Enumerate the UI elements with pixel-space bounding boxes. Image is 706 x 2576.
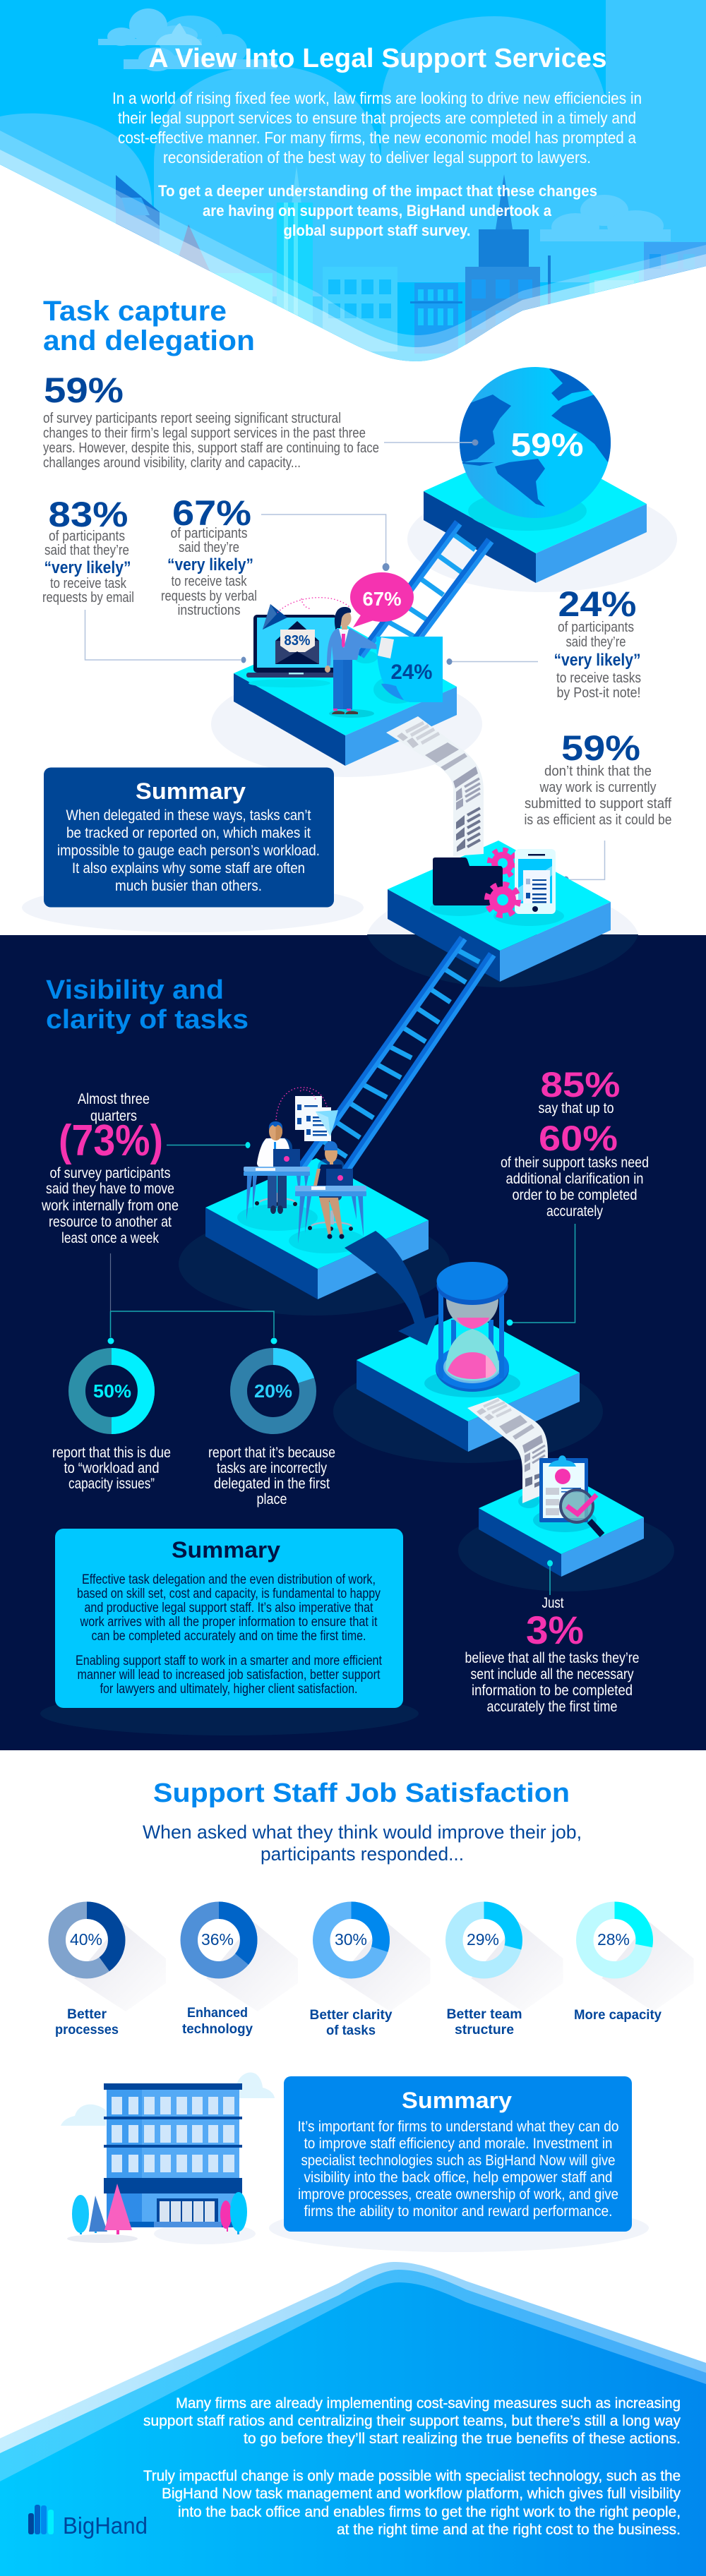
stat: 59 percent inefficient: submitted to support staff <box>525 796 671 812</box>
stat: 67 percent verbal: instructions <box>178 603 240 618</box>
stat: 59 percent structural changes: 59% <box>44 371 124 410</box>
decorative dotted arc: desk <box>276 1088 327 1120</box>
caption: incorrectly delegated: delegated in the first <box>214 1476 330 1492</box>
stat: 24 percent post-it <box>554 584 641 701</box>
stat: 59 percent inefficient <box>524 728 672 828</box>
icon: person <box>325 607 378 714</box>
label: envelope 83 percent: 83% <box>284 633 311 649</box>
connector: 73 percent to desk <box>167 1142 250 1148</box>
stat: 3 percent: sent include all the necessary <box>470 1666 634 1683</box>
text block: intro bold: are having on support teams, BigHand undertook a <box>203 202 552 219</box>
speech bubble: 67 percent <box>350 572 414 627</box>
stat: 83 percent email: to receive task <box>50 576 127 591</box>
stat: 59 percent inefficient: way work is currently <box>539 780 657 795</box>
stat: 73 percent: quarters <box>90 1108 137 1124</box>
stat: 59 percent structural changes <box>43 371 379 471</box>
icon: ladder upper <box>359 522 492 657</box>
summary: visibility: for lawyers and ultimately, higher client satisfaction. <box>100 1682 357 1697</box>
stat: 85 and 60 percent: 60% <box>539 1119 618 1158</box>
stat: 67 percent verbal: said they’re <box>179 540 239 555</box>
heading: task capture: Task capture <box>43 296 227 327</box>
donut: 20 percent <box>239 1356 308 1426</box>
stat: 59 percent inefficient: don’t think that the <box>544 764 652 779</box>
text block: intro: reconsideration of the best way to deliver legal support to lawyers. <box>163 148 591 167</box>
icon: paper plane <box>263 604 287 630</box>
stat: 59 percent structural changes: challanges around visibility, clarity and capacity... <box>43 455 301 471</box>
icon: globe <box>460 367 611 518</box>
summary: delegation: much busier than others. <box>115 878 262 894</box>
stat: 85 and 60 percent: additional clarification in <box>505 1171 644 1187</box>
text block: job satisfaction intro: When asked what they think would improve their job, <box>143 1822 582 1843</box>
text block: footer first paragraph <box>143 2395 681 2447</box>
stat: 24 percent post-it: of participants <box>558 620 634 635</box>
stat: 67 percent verbal: of participants <box>171 526 247 541</box>
summary: visibility: Effective task delegation and the even distribution of work, <box>82 1572 376 1587</box>
speech bubble: 67 percent: 67% <box>363 588 402 610</box>
decorative dotted arc: email <box>277 598 349 613</box>
summary: delegation: Summary <box>136 778 246 804</box>
text block: footer second paragraph <box>143 2468 681 2538</box>
donut: better processes 40 percent: processes <box>55 2023 119 2038</box>
stat: 24 percent post-it: “very likely” <box>554 651 641 670</box>
stat: 83 percent email: “very likely” <box>44 558 131 577</box>
caption: workload <box>52 1445 171 1492</box>
platform: clipboard <box>458 1471 674 1591</box>
text block: job satisfaction intro: participants responded... <box>261 1843 464 1865</box>
caption: workload: capacity issues” <box>68 1476 155 1492</box>
logo: BigHand: BigHand <box>63 2512 148 2539</box>
connector: 3 percent to platform <box>547 1560 553 1595</box>
stat: 24 percent post-it: 24% <box>558 584 637 624</box>
text block: footer second paragraph: BigHand Now task management and workflow platform, which gives full visibility <box>162 2486 681 2502</box>
donut: better clarity 30 percent: Better clarity <box>309 2008 393 2023</box>
icon: folder <box>433 857 503 905</box>
donut: enhanced technology 36 percent: Enhanced <box>187 2006 248 2021</box>
summary: delegation: be tracked or reported on, which makes it <box>66 825 311 841</box>
stat: 59 percent inefficient: is as efficient as it could be <box>524 812 672 828</box>
summary: visibility: Enabling support staff to work in a smarter and more efficient <box>76 1654 383 1668</box>
text block: footer first paragraph: Many firms are already implementing cost-saving measures such as increasing <box>176 2395 681 2412</box>
stat: 59 percent structural changes: changes to their firm’s legal support services in the past three <box>43 426 366 441</box>
stat: 83 percent email: said that they’re <box>44 543 129 558</box>
donut: better clarity 30 percent: 30% <box>335 1930 367 1949</box>
icon: city skyline <box>116 166 706 354</box>
stat: 24 percent post-it: by Post-it note! <box>556 685 641 701</box>
icon: pink gear small <box>489 850 516 877</box>
panel: navy section background <box>0 935 706 1750</box>
heading: visibility and clarity <box>46 975 249 1035</box>
text block: footer first paragraph: support staff ratios and centralizing their support teams, but there’s still a long way <box>143 2413 681 2429</box>
connector: 73 percent to donuts <box>107 1253 277 1344</box>
summary: visibility: and productive legal support staff. It’s also imperative that <box>85 1601 373 1615</box>
stat: 85 and 60 percent <box>501 1065 649 1220</box>
heading: task capture: and delegation <box>43 325 255 356</box>
caption: workload: report that this is due <box>52 1445 171 1461</box>
stat: 59 percent structural changes: years. However, despite this, support staff are continuing to face <box>43 440 379 456</box>
icon: clouds <box>98 8 671 241</box>
title: A View Into Legal Support Services <box>148 44 607 73</box>
text block: footer second paragraph: Truly impactful change is only made possible with specialist technology, such as the <box>143 2468 681 2484</box>
icon: pink gear large <box>487 884 518 915</box>
label: globe 59 percent: 59% <box>511 426 583 463</box>
summary: job satisfaction: to improve staff efficiency and morale. Investment in <box>304 2136 613 2152</box>
stat: 83 percent email: requests by email <box>42 590 134 606</box>
stat: 3 percent: believe that all the tasks they’re <box>465 1650 640 1666</box>
stat: 67 percent verbal: to receive task <box>171 574 247 589</box>
text block: footer second paragraph: into the back office and enables firms to get the right work to the right people, <box>178 2504 681 2520</box>
donut: 50 percent: 50% <box>93 1380 131 1402</box>
icon: documents <box>295 1096 338 1141</box>
connector: 60 percent to hourglass <box>507 1224 575 1325</box>
connector: 59 percent to globe <box>384 439 479 446</box>
stat: 67 percent verbal: “very likely” <box>167 555 253 574</box>
text block: footer first paragraph: to go before they’ll start realizing the true benefits of these actions. <box>244 2431 681 2447</box>
summary: job satisfaction: visibility into the back office, help empower staff and <box>304 2169 613 2186</box>
summary: delegation: impossible to gauge each person’s workload. <box>57 843 320 859</box>
stat: 59 percent structural changes: of survey participants report seeing significant structural <box>43 411 341 426</box>
donut: enhanced technology 36 percent: 36% <box>201 1930 234 1949</box>
summary: visibility: can be completed accurately and on time the first time. <box>92 1629 366 1644</box>
donut: better team structure 29 percent: Better team <box>446 2007 522 2022</box>
summary: job satisfaction: It’s important for firms to understand what they can do <box>298 2119 618 2135</box>
icon: clipboard and magnifier <box>539 1455 602 1535</box>
caption: incorrectly delegated: report that it’s because <box>208 1445 335 1461</box>
stat: 24 percent post-it: to receive tasks <box>556 670 641 686</box>
heading: visibility and clarity: clarity of tasks <box>46 1005 249 1035</box>
icon: ladder lower <box>298 937 494 1172</box>
caption: incorrectly delegated <box>208 1445 335 1507</box>
text block: intro: In a world of rising fixed fee work, law firms are looking to drive new efficiencies in <box>112 89 642 107</box>
stat: 59 percent inefficient: 59% <box>561 728 640 768</box>
stat: 3 percent: information to be completed <box>472 1683 633 1699</box>
icon: paper strip upper <box>386 716 484 856</box>
text block: intro: their legal support services to ensure that projects are completed in a timely and <box>118 109 636 127</box>
logo: BigHand <box>28 2505 148 2539</box>
caption: incorrectly delegated: tasks are incorrectly <box>217 1460 327 1476</box>
stat: 73 percent: (73%) <box>59 1117 163 1165</box>
connector: 59 percent to phone <box>563 841 604 882</box>
summary: visibility: based on skill set, cost and capacity, is fundamental to happy <box>77 1587 381 1601</box>
platform: folder and phone <box>367 841 638 987</box>
platform: two desks <box>179 1158 450 1316</box>
icon: hourglass <box>436 1262 509 1392</box>
heading: visibility and clarity: Visibility and <box>46 975 224 1005</box>
stat: 24 percent post-it: said they’re <box>566 634 626 650</box>
stat: 73 percent: Almost three <box>78 1091 150 1107</box>
donut: better processes 40 percent: Better <box>67 2007 107 2022</box>
panel: footer banner <box>0 2262 706 2576</box>
summary: delegation: It also explains why some staff are often <box>72 860 305 877</box>
text block: intro <box>112 89 642 167</box>
donut: 20 percent: 20% <box>254 1380 292 1402</box>
donut: enhanced technology 36 percent <box>182 1910 298 2037</box>
icon: post-it note <box>376 637 443 702</box>
stat: 85 and 60 percent: 85% <box>541 1065 620 1105</box>
stat: 73 percent: resource to another at <box>49 1214 172 1230</box>
stat: 85 and 60 percent: accurately <box>546 1203 603 1220</box>
summary: visibility <box>40 1529 419 1735</box>
summary: job satisfaction: specialist technologies such as BigHand Now will give <box>301 2153 616 2169</box>
summary: job satisfaction: firms the ability to monitor and reward performance. <box>304 2203 613 2220</box>
text block: intro bold <box>158 182 597 239</box>
stat: 85 and 60 percent: of their support tasks need <box>501 1155 649 1171</box>
stat: 85 and 60 percent: say that up to <box>538 1100 614 1117</box>
summary: visibility: Summary <box>172 1537 280 1563</box>
summary: visibility: manner will lead to increased job satisfaction, better support <box>78 1668 381 1683</box>
arrow: curved to hourglass <box>345 1231 439 1345</box>
donut: more capacity 28 percent <box>574 1910 693 2023</box>
stat: 73 percent: work internally from one <box>41 1198 179 1214</box>
stat: 67 percent verbal <box>161 493 257 618</box>
text block: intro bold: global support staff survey. <box>284 222 470 239</box>
summary: job satisfaction <box>269 2076 649 2252</box>
icon: trees <box>72 2184 247 2234</box>
summary: delegation <box>22 768 364 932</box>
donut: better clarity 30 percent <box>309 1910 431 2038</box>
icon: light paper plane <box>316 1110 338 1136</box>
stat: 3 percent <box>465 1595 640 1715</box>
icon: phone <box>515 849 556 914</box>
icon: paper strip lower <box>467 1397 548 1503</box>
panel: header banner <box>0 0 706 367</box>
connector: 67 percent to bubble <box>261 514 390 571</box>
connector: 24 percent to post-it <box>446 658 538 665</box>
stat: 73 percent: of survey participants <box>49 1165 171 1181</box>
icon: man at desk <box>244 1121 310 1220</box>
donut: enhanced technology 36 percent: technology <box>182 2022 253 2037</box>
stat: 67 percent verbal: 67% <box>172 493 251 533</box>
heading: task capture <box>43 296 255 356</box>
label: post-it 24 percent: 24% <box>391 661 432 684</box>
stat: 85 and 60 percent: order to be completed <box>513 1187 637 1203</box>
summary: visibility: work arrives with all the proper information to ensure that it <box>80 1615 378 1630</box>
donut: better processes 40 percent <box>55 1910 166 2038</box>
stat: 73 percent: said they have to move <box>46 1181 174 1197</box>
donut: better team structure 29 percent: 29% <box>467 1930 499 1949</box>
icon: paper in hand <box>378 637 394 658</box>
platform: hourglass <box>333 1311 603 1463</box>
icon: office building <box>61 2072 275 2244</box>
text block: intro: cost-effective manner. For many firms, the new economic model has prompted a <box>118 128 636 147</box>
heading: support staff job satisfaction: Support Staff Job Satisfaction <box>153 1778 570 1808</box>
platform: globe <box>407 360 677 592</box>
stat: 3 percent: 3% <box>526 1608 584 1652</box>
donut: better processes 40 percent: 40% <box>70 1930 102 1949</box>
stat: 83 percent email <box>42 495 134 606</box>
summary: delegation: When delegated in these ways, tasks can’t <box>66 807 311 824</box>
stat: 73 percent: least once a week <box>61 1230 159 1246</box>
text block: intro bold: To get a deeper understanding of the impact that these changes <box>158 182 597 200</box>
donut: better clarity 30 percent: of tasks <box>326 2023 376 2038</box>
caption: workload: to “workload and <box>64 1460 160 1476</box>
caption: incorrectly delegated: place <box>257 1491 287 1507</box>
stat: 83 percent email: 83% <box>48 495 128 534</box>
text block: job satisfaction intro <box>143 1822 582 1865</box>
donut: better team structure 29 percent <box>446 1910 563 2038</box>
connector: 83 percent to laptop <box>85 610 246 663</box>
donut: better team structure 29 percent: structure <box>455 2023 514 2038</box>
stat: 67 percent verbal: requests by verbal <box>161 589 257 604</box>
text block: footer second paragraph: at the right time and at the right cost to the business. <box>337 2522 681 2538</box>
stat: 3 percent: accurately the first time <box>487 1699 617 1715</box>
summary: job satisfaction: Summary <box>402 2088 512 2113</box>
summary: job satisfaction: improve processes, create ownership of work, and give <box>298 2186 618 2203</box>
icon: woman at desk <box>295 1141 366 1244</box>
stat: 83 percent email: of participants <box>49 529 125 544</box>
stat: 3 percent: Just <box>542 1595 564 1611</box>
donut: more capacity 28 percent: More capacity <box>574 2008 662 2023</box>
stat: 73 percent <box>41 1091 179 1246</box>
platform: email and post-it <box>211 625 482 777</box>
donut: 50 percent <box>77 1356 146 1426</box>
donut: more capacity 28 percent: 28% <box>597 1930 630 1949</box>
icon: laptop with envelope <box>246 604 345 678</box>
